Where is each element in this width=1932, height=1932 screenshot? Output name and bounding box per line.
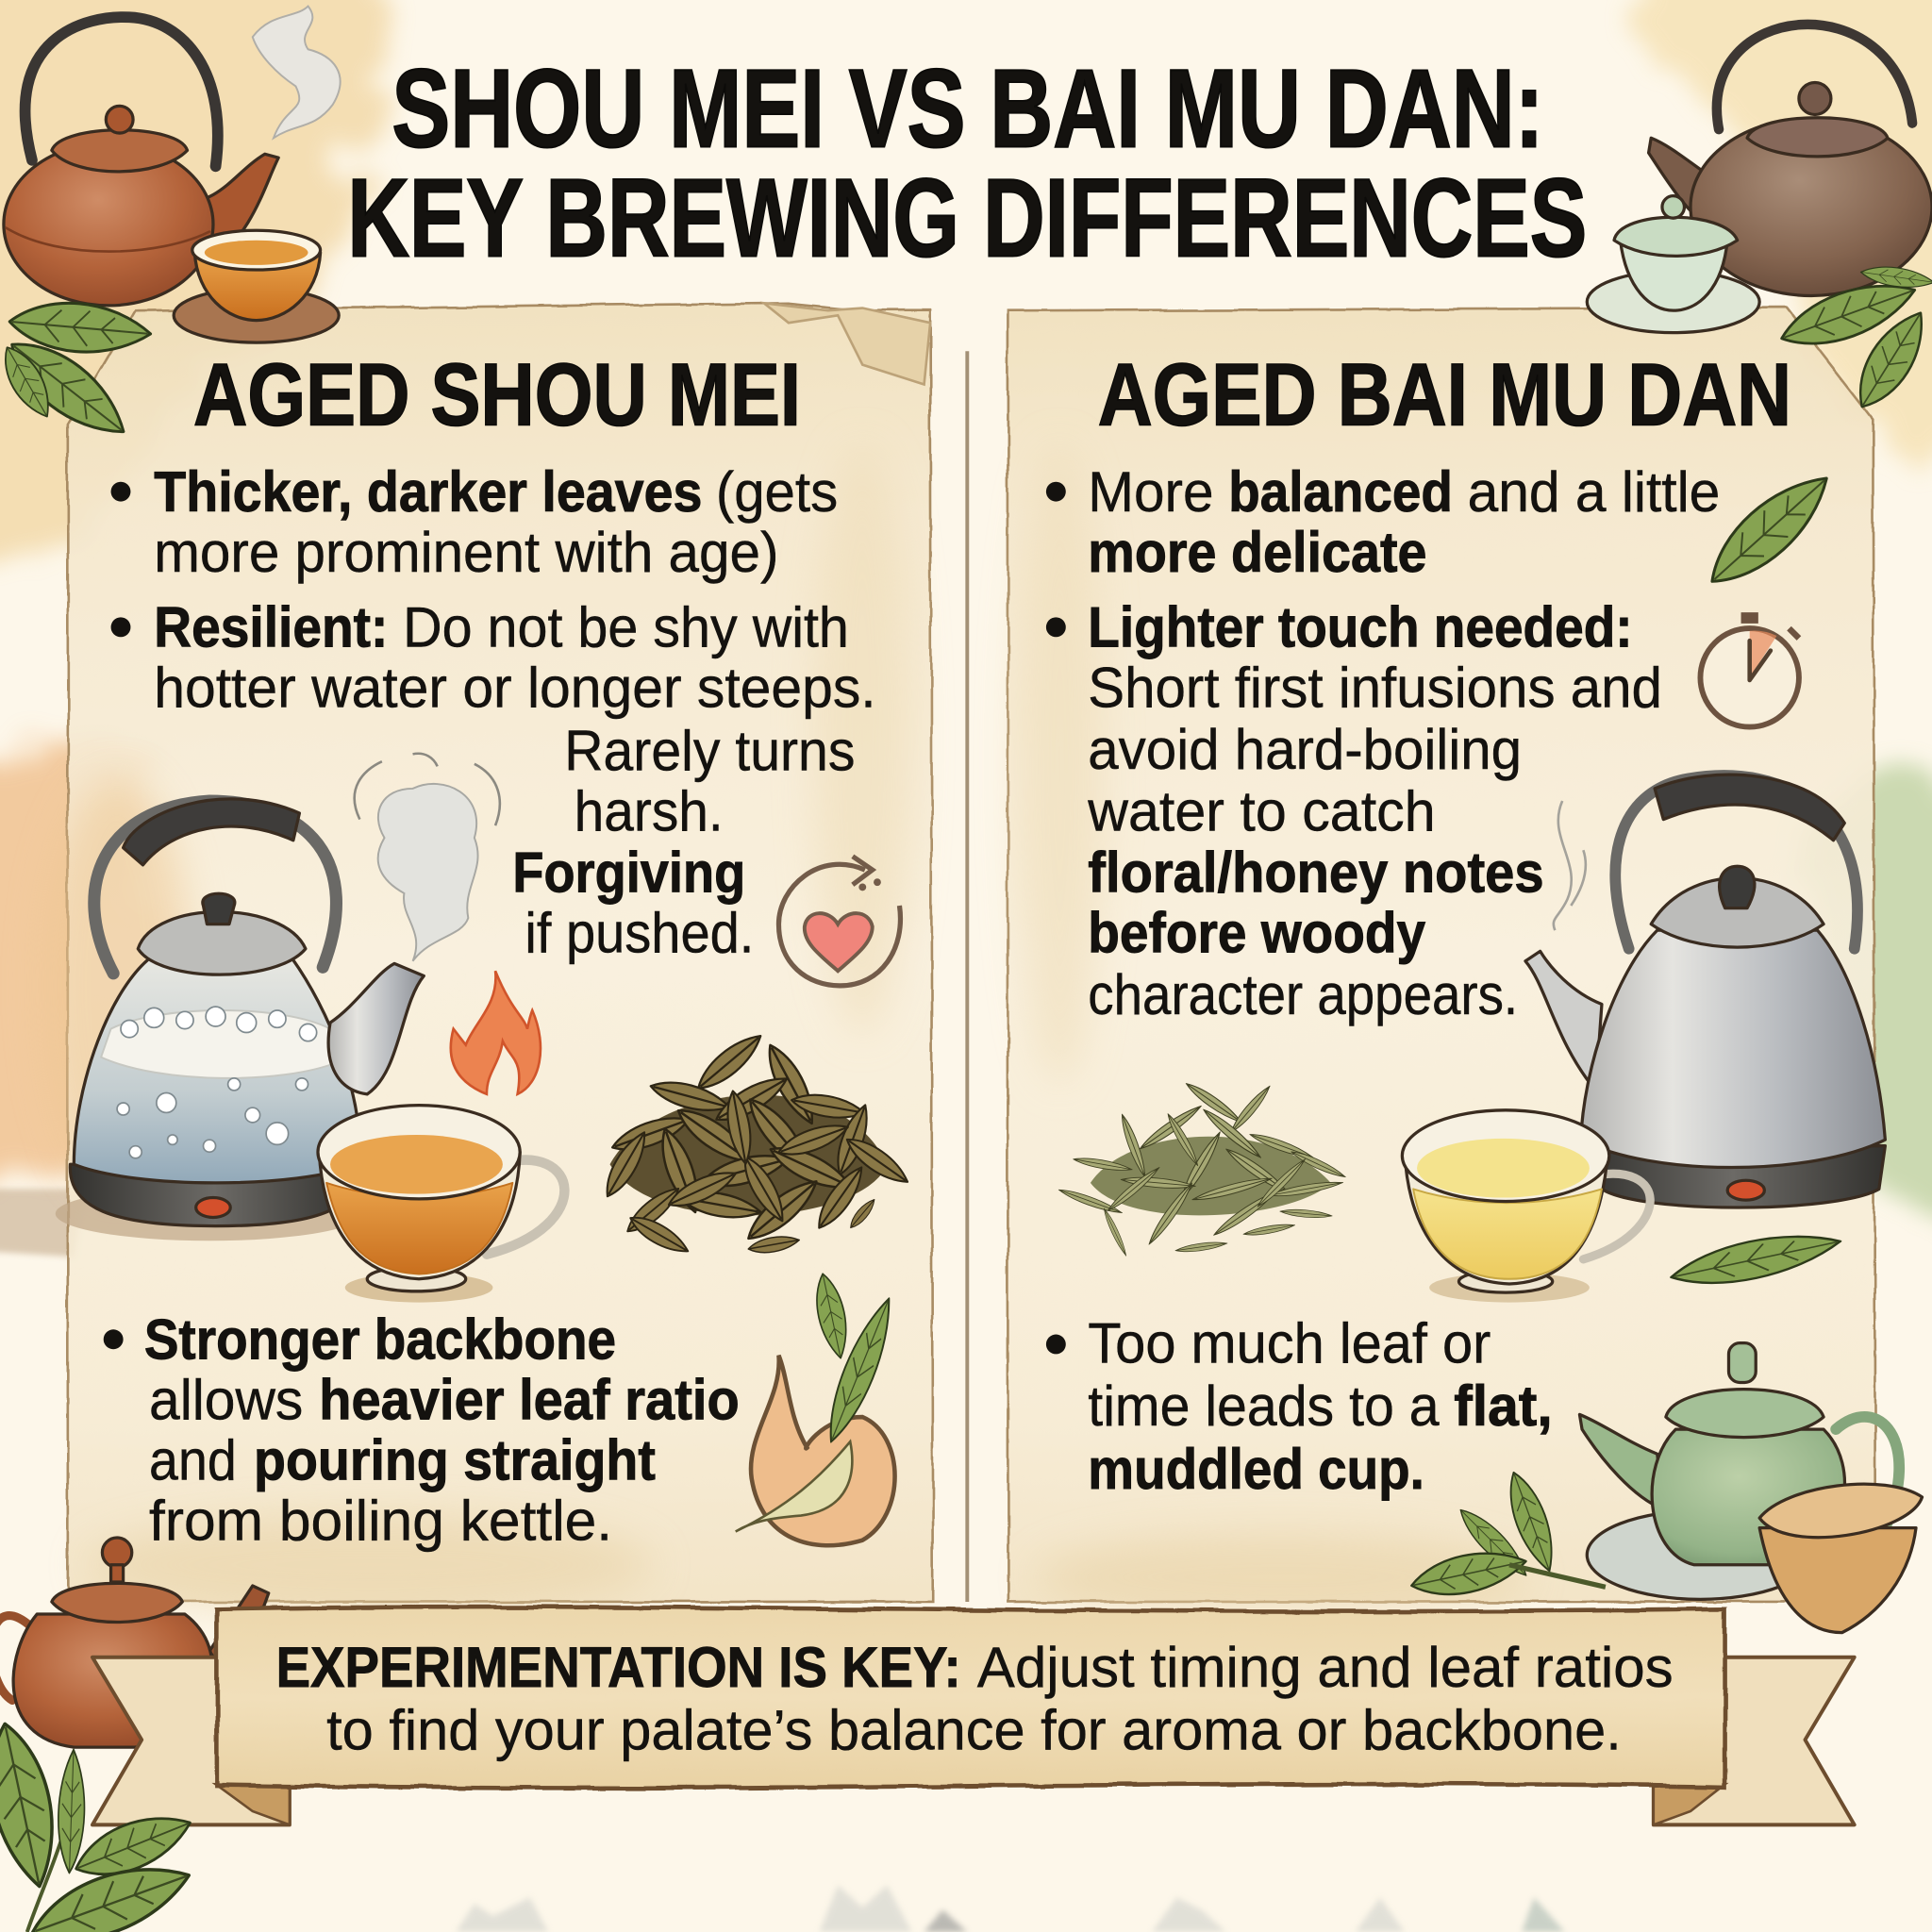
bullet 3: from boiling kettle. [149, 1490, 612, 1553]
icon: green teapot [1579, 1343, 1899, 1599]
icon: right steam [1554, 801, 1586, 930]
right column text [1046, 460, 1720, 1501]
icon: leaf sprig [1407, 1468, 1606, 1604]
panel background left [68, 303, 933, 1602]
bullet 1: (gets [716, 460, 838, 524]
left column text [104, 460, 876, 1553]
bullet 2: Rarely turns [564, 719, 855, 782]
bullet 2: water to catch [1087, 779, 1436, 842]
title: KEY BREWING DIFFERENCES [347, 157, 1587, 280]
banner text: EXPERIMENTATION IS KEY: [276, 1636, 961, 1699]
bullet 2: harsh. [575, 779, 724, 842]
bullet 3: Stronger backbone [144, 1308, 616, 1372]
bullet 1: balanced [1228, 460, 1453, 524]
icon: pale leaf pile [1058, 1079, 1347, 1257]
icon: teapot bottom left [0, 1538, 269, 1747]
ribbon right fold [1654, 1784, 1725, 1824]
banner text: Adjust timing and leaf ratios [977, 1636, 1674, 1699]
bullet 2: before woody [1088, 902, 1426, 965]
icon: heart with cycle arrow [778, 857, 900, 986]
bullet 2: hotter water or longer steeps. [154, 657, 876, 720]
panel background right [1008, 308, 1875, 1602]
title: SHOU MEI VS BAI MU DAN: [391, 46, 1544, 170]
icon: dark leaf pile [599, 1027, 913, 1259]
icon: brown teapot top right [1649, 25, 1932, 295]
bullet 2: Lighter touch needed: [1088, 596, 1633, 659]
bullet 1: More [1088, 460, 1214, 524]
bullet 2: avoid hard-boiling [1088, 718, 1522, 781]
icon: green leaves top left [0, 298, 153, 451]
bullet 2: Short first infusions and [1088, 657, 1662, 720]
bullet 2: Do not be shy with [403, 596, 849, 659]
panel: aged bai mu dan [1008, 308, 1875, 1602]
panel heading left: AGED SHOU MEI [193, 345, 801, 444]
bullet 1 [111, 460, 838, 584]
icon: clay teapot top left [4, 17, 278, 306]
icon: kettle steam [355, 754, 500, 961]
bullet 2 [111, 596, 876, 965]
bullet 3: Too much leaf or [1088, 1312, 1491, 1375]
icon: lone green leaf [1668, 1224, 1844, 1295]
bullet 1: and a little [1468, 460, 1720, 524]
bullet 3: allows [149, 1369, 303, 1432]
icon: bamboo cup [1759, 1484, 1923, 1633]
icon: flame [451, 971, 541, 1094]
ribbon left tail [92, 1657, 290, 1824]
icon: green gaiwan [1587, 196, 1759, 333]
folded corner left panel [764, 303, 930, 385]
bullet 1: more delicate [1088, 521, 1426, 584]
bullet 3: and [149, 1429, 237, 1492]
centre divider [966, 351, 969, 1602]
bullet 2: Forgiving [512, 841, 745, 905]
icon: amber tea cup [318, 1106, 564, 1303]
panel tone stains [43, 443, 1528, 1621]
bullet 1: more prominent with age) [154, 521, 778, 584]
bullet 2: if pushed. [525, 902, 754, 965]
bullet 1 [1046, 460, 1720, 584]
bullet 3: time leads to a [1088, 1374, 1440, 1438]
bullet 2 [1046, 596, 1662, 1026]
bullet 3 [1046, 1312, 1553, 1501]
icon: green leaves top right [1774, 263, 1932, 418]
ribbon left fold [216, 1784, 290, 1824]
icon: stopwatch [1700, 612, 1799, 727]
bullet 2: Resilient: [154, 596, 388, 659]
icon: silver kettle [1525, 774, 1885, 1208]
icon: steam top left [253, 7, 341, 138]
bullet 3: muddled cup. [1088, 1438, 1424, 1501]
bullet 3: flat, [1454, 1374, 1553, 1438]
banner ribbon [92, 1607, 1855, 1824]
icon: leaf sprig bottom left [0, 1718, 198, 1932]
icon: leaf and flame swirl [736, 1271, 903, 1545]
title [347, 46, 1587, 280]
panel heading right: AGED BAI MU DAN [1098, 345, 1791, 444]
icon: yellow tea cup [1402, 1110, 1650, 1303]
bullet 1: Thicker, darker leaves [154, 460, 702, 524]
ribbon main band [217, 1607, 1725, 1788]
bullet 3: pouring straight [254, 1429, 656, 1492]
bullet 3 [104, 1308, 740, 1553]
bullet 3: heavier leaf ratio [319, 1369, 740, 1432]
panel: aged shou mei [68, 303, 933, 1602]
watercolor background stains [0, 0, 1932, 1257]
banner text [276, 1636, 1674, 1762]
faint bottom illustrations [456, 1885, 1565, 1932]
bullet 2: floral/honey notes [1088, 841, 1544, 905]
icon: green leaf top right panel [1696, 460, 1842, 599]
ribbon right tail [1654, 1657, 1855, 1824]
banner text: to find your palate’s balance for aroma or backbone. [326, 1699, 1622, 1762]
bullet 2: character appears. [1088, 963, 1518, 1026]
icon: boiling glass kettle [56, 799, 424, 1241]
icon: amber cup and saucer [174, 230, 339, 342]
